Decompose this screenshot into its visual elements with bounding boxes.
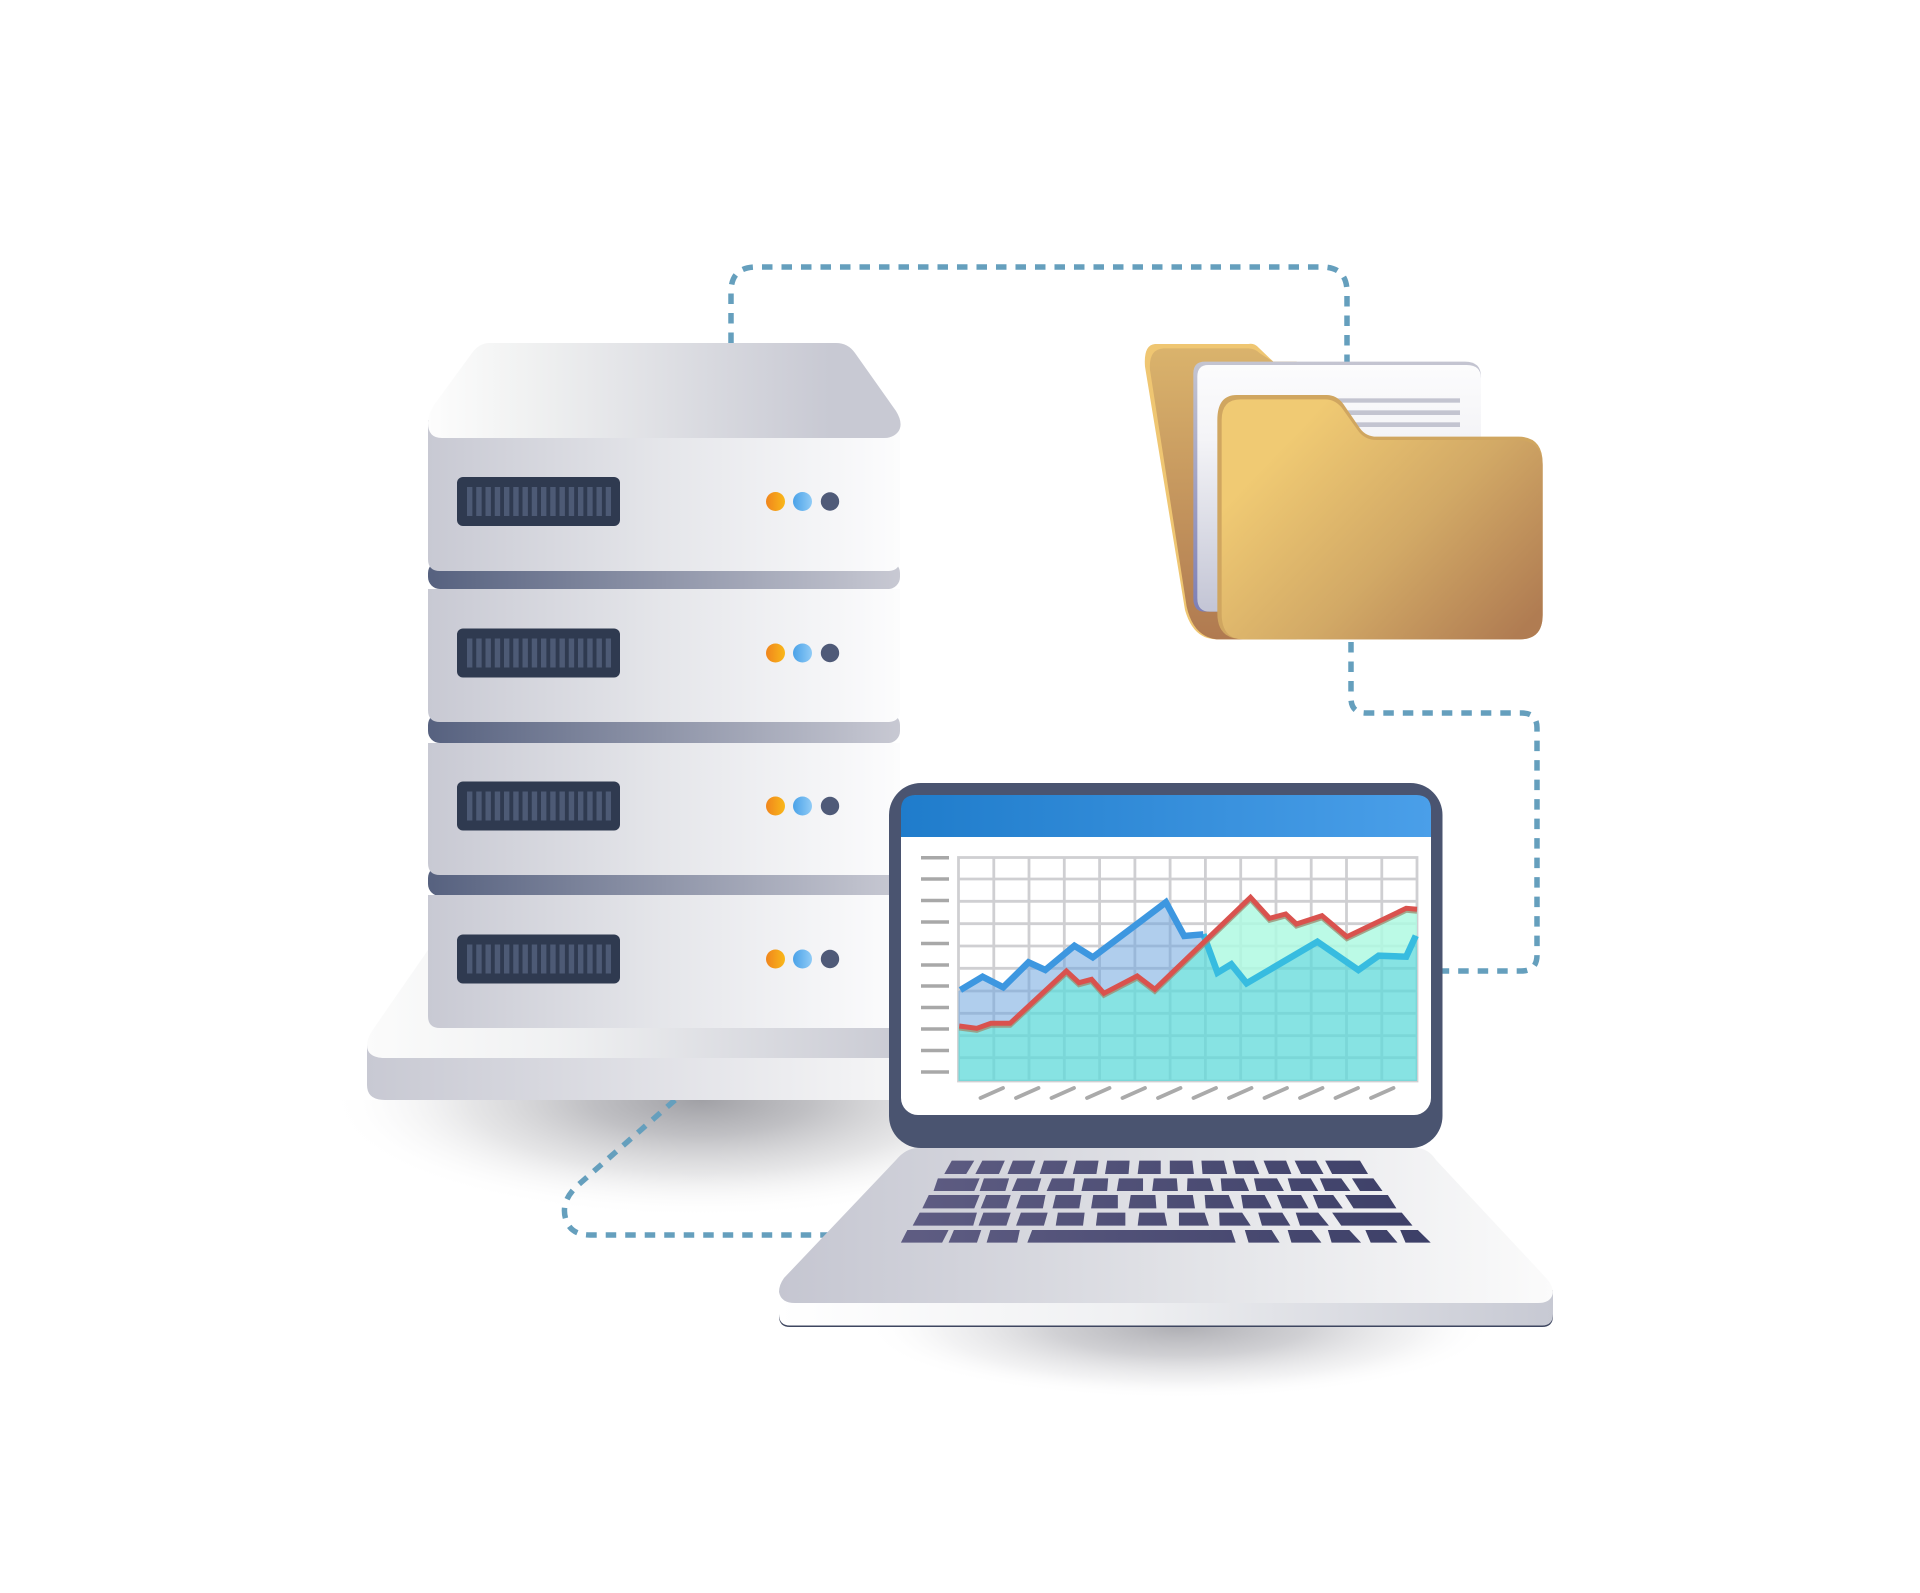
- laptop: [779, 783, 1553, 1327]
- dashed connector: server to folder: [731, 267, 1347, 362]
- y-axis tick marks: [921, 858, 949, 1072]
- blue line: [960, 902, 1203, 990]
- server unit 3: [428, 743, 900, 896]
- folder icon: [1145, 344, 1543, 639]
- dashed connector: server to laptop: [564, 1100, 832, 1235]
- red line: [959, 897, 1417, 1030]
- teal area: [958, 935, 1417, 1081]
- x-axis tick marks: [980, 1088, 1394, 1098]
- server ground shadow: [325, 1100, 1075, 1220]
- laptop screen bezel: [889, 783, 1442, 1148]
- server unit 2: [428, 589, 900, 743]
- app header bar: [901, 795, 1431, 837]
- laptop base: [779, 1148, 1553, 1327]
- folder back flap: [1145, 344, 1297, 639]
- blue area: [958, 902, 1204, 1028]
- server rack: [367, 343, 905, 1100]
- server top lid: [428, 343, 901, 438]
- cyan line: [1203, 934, 1416, 983]
- paper document: [1193, 362, 1481, 612]
- server base platform: [367, 950, 905, 1100]
- laptop ground shadow: [865, 1327, 1495, 1400]
- laptop screen: [901, 795, 1431, 1115]
- folder front pocket: [1217, 395, 1543, 639]
- dashed connector: folder to laptop: [1351, 642, 1537, 971]
- line and area chart: [958, 857, 1417, 1081]
- keyboard: [901, 1161, 1431, 1243]
- chart grid: [958, 857, 1417, 1081]
- mint area: [1204, 897, 1417, 983]
- server unit 1: [428, 420, 900, 589]
- server unit 4: [428, 895, 900, 1028]
